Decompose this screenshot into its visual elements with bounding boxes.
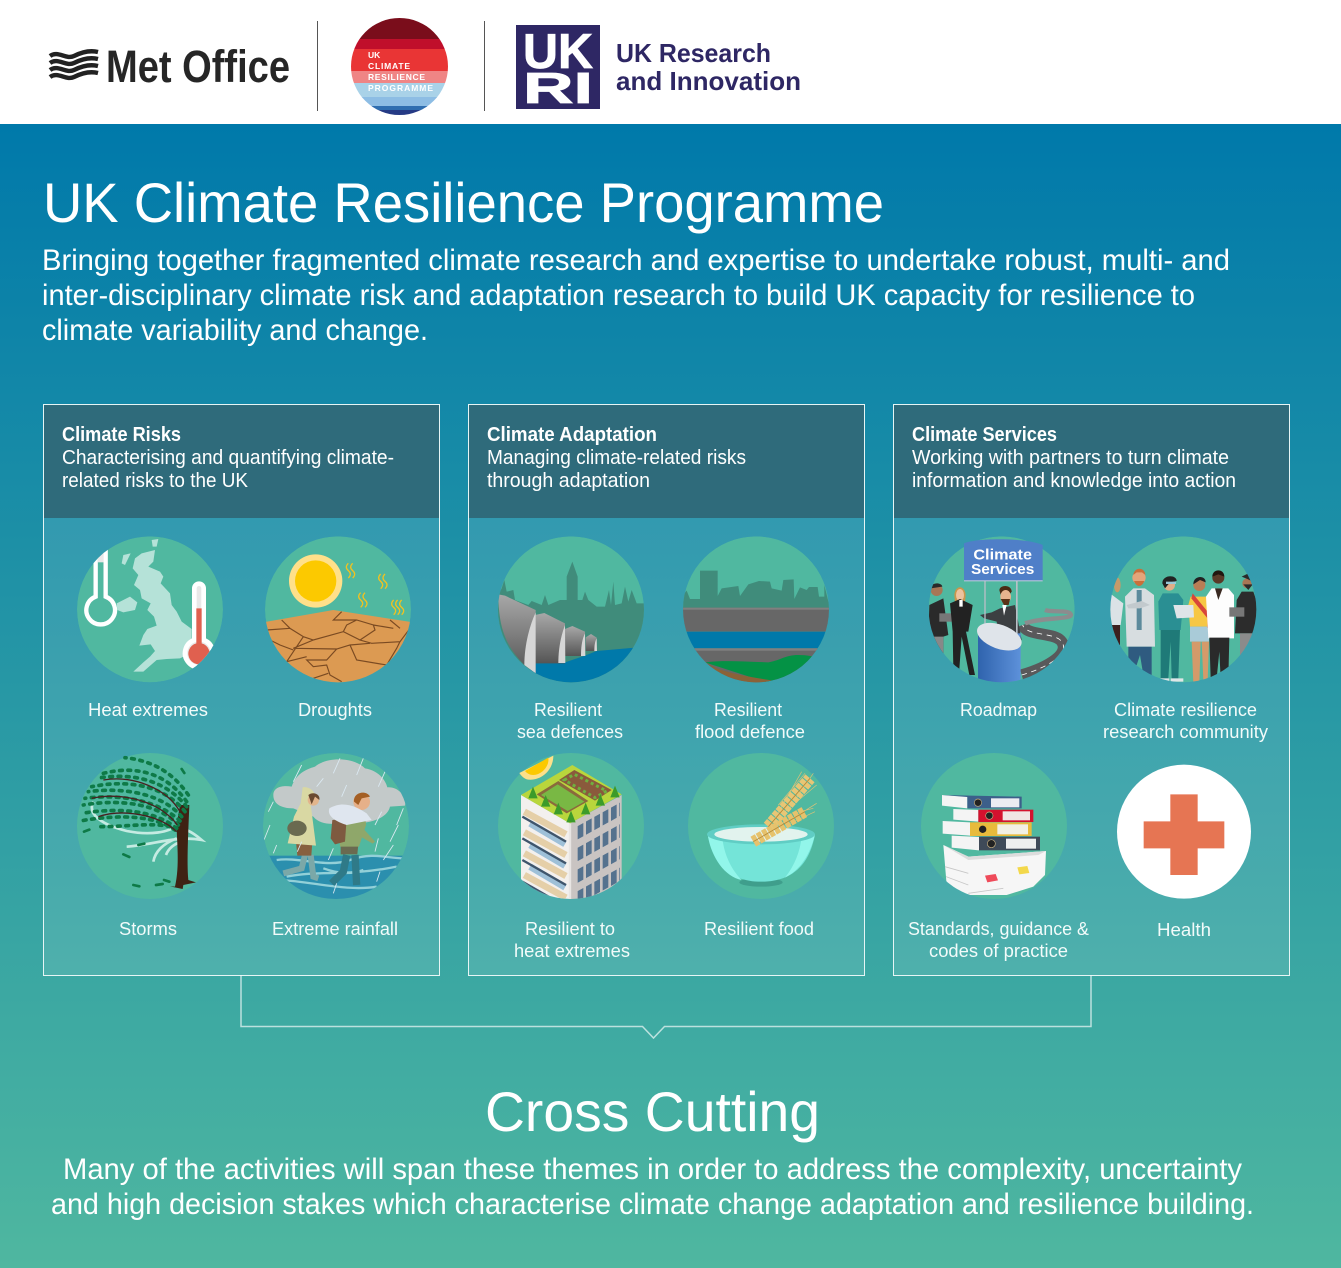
label: resilient flood defence (695, 700, 805, 742)
icon group: roadmap and community (928, 536, 1257, 683)
label: resilient flood defence: flood defence (695, 722, 805, 742)
logo: UKRI: UK (523, 25, 593, 79)
label: resilient to heat extremes: heat extremes (514, 941, 630, 961)
label: heat extremes: Heat extremes (88, 700, 208, 720)
logo: UKRI (516, 25, 801, 113)
label: climate resilience research community: research community (1103, 722, 1268, 742)
title: UK Climate Resilience Programme (43, 171, 884, 234)
logo: UK Climate Resilience Programme: RESILIENCE (368, 72, 425, 82)
logo: UK Climate Resilience Programme: PROGRAMME (368, 83, 433, 93)
icon: research community (1110, 536, 1257, 683)
divider (484, 21, 485, 111)
icon: extreme rainfall (260, 753, 413, 902)
intro text: Bringing together fragmented climate research and expertise to undertake robust, multi- and (42, 244, 1230, 277)
label: resilient flood defence: Resilient (714, 700, 782, 720)
panel header: Climate Adaptation: through adaptation (487, 470, 650, 492)
icon: standards binders (921, 753, 1067, 899)
panel header: Climate Adaptation: Managing climate-related risks (487, 447, 746, 469)
logo: UK Climate Resilience Programme: UK (368, 50, 381, 60)
cross cutting text (51, 1153, 1254, 1221)
sign: climate services: Services (971, 561, 1034, 578)
logo: Met Office: Met Office (106, 41, 290, 92)
intro text: inter-disciplinary climate risk and adaptation research to build UK capacity for resilience to (42, 279, 1195, 312)
icon group: heat-resilient building and food (498, 753, 834, 909)
label: roadmap: Roadmap (960, 700, 1037, 720)
panel header: Climate Services: information and knowledge into action (912, 470, 1236, 492)
icon: sea defences (495, 536, 648, 685)
label: climate resilience research community (1103, 700, 1268, 742)
label: resilient to heat extremes: Resilient to (525, 919, 615, 939)
label: storms: Storms (119, 919, 177, 939)
panel header: Climate Risks: related risks to the UK (62, 470, 249, 492)
label: droughts: Droughts (298, 700, 372, 720)
sign: climate services: Climate (973, 547, 1032, 564)
logo: Met Office (50, 41, 290, 92)
label: extreme rainfall: Extreme rainfall (272, 919, 398, 939)
panel header: Climate Services (894, 404, 1290, 518)
panel header: Climate Risks: Climate Risks (62, 424, 181, 446)
icon: droughts (263, 536, 413, 685)
label: climate resilience research community: Climate resilience (1114, 700, 1257, 720)
label: standards, guidance and codes of practice: codes of practice (929, 941, 1068, 961)
label: standards, guidance and codes of practice (908, 919, 1089, 961)
icon: heat extremes map (77, 536, 223, 682)
icon: roadmap (928, 536, 1075, 683)
divider (317, 21, 318, 111)
intro text (42, 244, 1230, 347)
icon: storms tree (77, 753, 223, 899)
sign: climate services (964, 539, 1043, 581)
label: resilient to heat extremes (514, 919, 630, 961)
label: resilient sea defences (517, 700, 623, 742)
header bar (0, 0, 1341, 124)
icon group: heat extremes and droughts (77, 536, 413, 685)
label: resilient food: Resilient food (704, 919, 814, 939)
icon: flood defence (682, 536, 832, 688)
logo: UK Climate Resilience Programme (351, 18, 448, 116)
icon group: sea and flood defences (495, 536, 832, 688)
panel header: Climate Services: Working with partners to turn climate (912, 447, 1229, 469)
panel: Climate Services (894, 404, 1290, 976)
panel header: Climate Services: Climate Services (912, 424, 1057, 446)
panel header: Climate Adaptation: Climate Adaptation (487, 424, 657, 446)
logo: UKRI: UK Research (616, 38, 771, 68)
heading: Cross Cutting: Cross Cutting (485, 1080, 820, 1143)
panel header: Climate Risks (44, 404, 440, 518)
cross cutting text: Many of the activities will span these themes in order to address the complexity, uncertainty (63, 1153, 1242, 1186)
panel: Climate Adaptation (468, 404, 864, 976)
icon group: standards and health (921, 753, 1251, 899)
panel header: Climate Adaptation (468, 404, 864, 518)
label: health: Health (1157, 920, 1211, 940)
icon group: storms and rainfall (77, 753, 413, 902)
icon: resilient food bowl (688, 753, 834, 899)
label: resilient sea defences: sea defences (517, 722, 623, 742)
icon: health (1117, 765, 1251, 899)
panel: Climate Risks (44, 404, 440, 976)
bracket arrow (241, 976, 1091, 1038)
logo: UK Climate Resilience Programme: CLIMATE (368, 61, 410, 71)
logo: UKRI: RI (523, 64, 593, 113)
intro text: climate variability and change. (42, 314, 428, 347)
label: resilient sea defences: Resilient (534, 700, 602, 720)
icon: resilient building (498, 753, 644, 909)
logo: UKRI: and Innovation (616, 66, 801, 96)
label: standards, guidance and codes of practice: Standards, guidance & (908, 919, 1089, 939)
panel header: Climate Risks: Characterising and quantifying climate- (62, 447, 394, 469)
cross cutting text: and high decision stakes which characterise climate change adaptation and resilience building. (51, 1188, 1254, 1221)
